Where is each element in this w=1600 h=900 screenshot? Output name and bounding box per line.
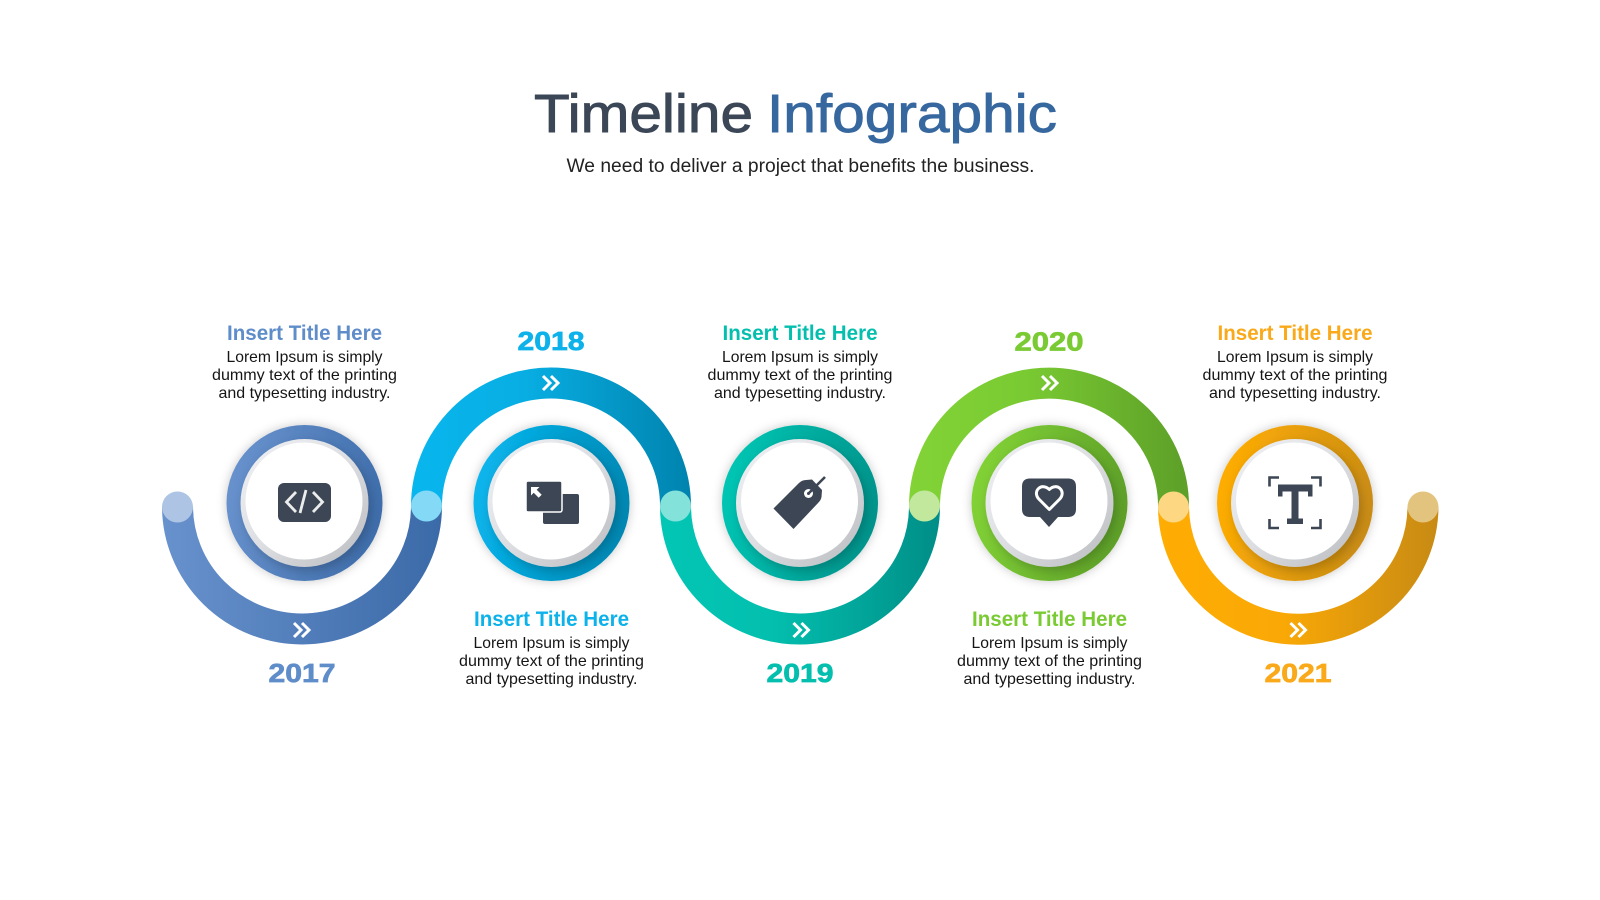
text block 2019: Lorem Ipsum is simply <box>722 349 878 366</box>
arc: 2019 <box>676 506 924 629</box>
heading 2019: Insert Title Here <box>722 322 878 345</box>
disc 2017 <box>240 439 368 567</box>
year 2020: 2020 <box>1014 326 1084 356</box>
panel: 2017 <box>212 322 397 688</box>
icon: price tag <box>774 477 825 529</box>
text block 2021: Lorem Ipsum is simply <box>1217 349 1373 366</box>
text block 2017 <box>212 349 397 402</box>
track end caps and joints <box>162 490 1438 522</box>
text block 2017: dummy text of the printing <box>212 367 397 384</box>
text block 2020: and typesetting industry. <box>964 671 1136 688</box>
title: Timeline <box>534 84 753 144</box>
heading 2017: Insert Title Here <box>227 322 382 345</box>
arc: 2020 <box>924 383 1174 506</box>
year 2021: 2021 <box>1264 658 1332 688</box>
text block 2018: Lorem Ipsum is simply <box>474 635 630 652</box>
text block 2021 <box>1202 349 1388 402</box>
disc 2021 <box>1231 439 1359 567</box>
text block 2018: and typesetting industry. <box>466 671 638 688</box>
heading 2018: Insert Title Here <box>474 608 629 631</box>
text block 2019: and typesetting industry. <box>714 385 886 402</box>
arrow 2018 <box>543 376 558 390</box>
arc: 2018 <box>426 383 676 506</box>
arc: 2021 <box>1174 506 1423 629</box>
arrow 2020 <box>1042 376 1057 390</box>
text block 2020: Lorem Ipsum is simply <box>972 635 1128 652</box>
disc 2018 <box>488 439 616 567</box>
timeline track <box>162 383 1438 629</box>
panel: 2019 <box>708 322 892 688</box>
arrow 2017 <box>294 623 309 637</box>
title: Infographic <box>767 84 1057 144</box>
text block 2021: dummy text of the printing <box>1202 367 1388 384</box>
title <box>534 84 1057 144</box>
year 2017: 2017 <box>268 658 336 688</box>
ring 2019 <box>722 425 878 581</box>
icon: code <box>278 483 331 522</box>
icon: text frame <box>1270 478 1320 528</box>
text block 2017: and typesetting industry. <box>218 385 390 402</box>
text block 2018: dummy text of the printing <box>459 653 644 670</box>
text block 2018 <box>459 635 644 688</box>
ring 2021 <box>1217 425 1373 581</box>
heading 2020: Insert Title Here <box>972 608 1127 631</box>
arrow 2021 <box>1290 623 1306 637</box>
arrow 2019 <box>794 623 808 637</box>
ring 2020 <box>972 425 1128 581</box>
panel: 2020 <box>957 326 1142 688</box>
text block 2019 <box>708 349 892 402</box>
text block 2020 <box>957 635 1142 688</box>
text block 2020: dummy text of the printing <box>957 653 1142 670</box>
ring 2018 <box>474 425 630 581</box>
text block 2017: Lorem Ipsum is simply <box>226 349 382 366</box>
disc 2020 <box>986 439 1114 567</box>
icon: resize windows <box>526 481 579 524</box>
disc 2019 <box>736 439 864 567</box>
year 2019: 2019 <box>766 658 834 688</box>
arc: 2017 <box>178 506 426 629</box>
heading 2021: Insert Title Here <box>1218 322 1372 345</box>
ring 2017 <box>226 425 382 581</box>
year 2018: 2018 <box>518 326 584 356</box>
text block 2019: dummy text of the printing <box>708 367 892 384</box>
icon: heart speech bubble <box>1022 478 1076 527</box>
subtitle: We need to deliver a project that benefits the business. <box>566 156 1034 177</box>
panel: 2021 <box>1202 322 1388 688</box>
text block 2021: and typesetting industry. <box>1209 385 1381 402</box>
panel: 2018 <box>459 326 644 688</box>
